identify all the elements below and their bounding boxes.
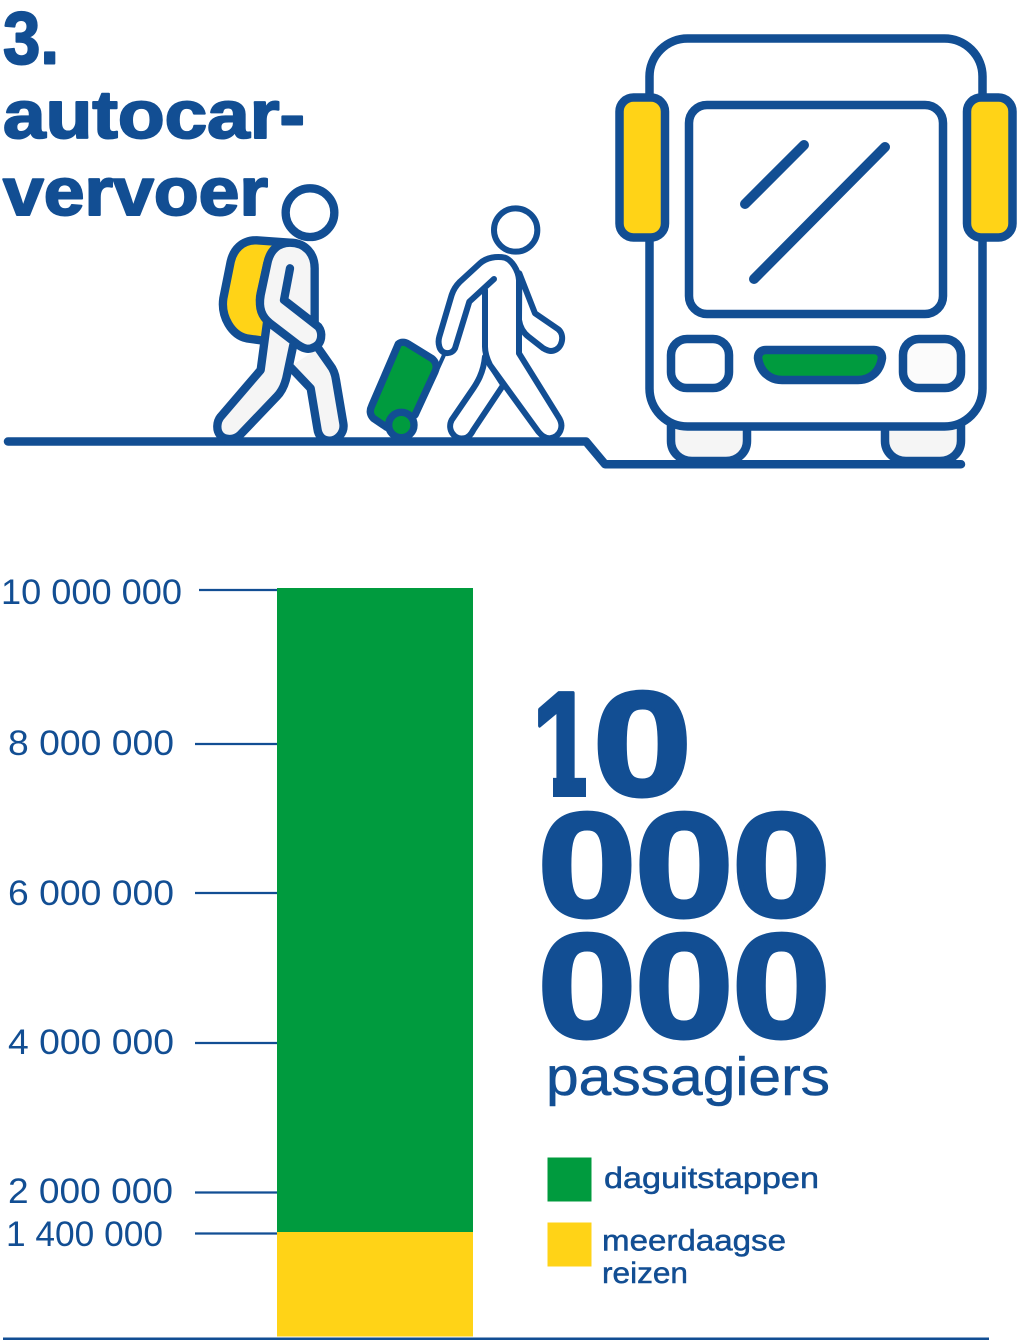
- bus body: [650, 38, 982, 426]
- grille: [758, 350, 882, 380]
- title: vervoer: [3, 154, 268, 230]
- bar chart: [1, 573, 989, 1340]
- big number: 10 000 000 passagiers: 000: [538, 903, 831, 1069]
- legend: [548, 1158, 819, 1290]
- bar: meerdaagse reizen: [277, 1232, 473, 1336]
- right mirror: [967, 98, 1012, 238]
- big number: 10 000 000 passagiers: 0: [593, 661, 692, 827]
- big number: 10 000 000 passagiers: 1: [532, 661, 594, 827]
- windshield reflections: [745, 145, 885, 279]
- icon: suitcase: [370, 342, 444, 438]
- legend label: meerdaagse reizen: [602, 1224, 786, 1290]
- legend swatch: daguitstappen: [548, 1158, 592, 1202]
- axis labels: 2 000 000: [8, 1172, 173, 1211]
- legend label: meerdaagse reizen: reizen: [602, 1257, 688, 1290]
- icon: bus front: [620, 38, 1012, 461]
- bar: daguitstappen: [277, 588, 473, 1232]
- axis labels: 10 000 000: [1, 573, 182, 612]
- left mirror: [620, 98, 665, 238]
- ground line: [8, 442, 961, 464]
- legend label: daguitstappen: daguitstappen: [604, 1162, 819, 1195]
- axis labels: 1 400 000: [6, 1215, 163, 1254]
- icon: traveller pulling suitcase: [439, 208, 562, 439]
- windshield: [689, 105, 943, 314]
- big number: 10 000 000 passagiers: passagiers: [546, 1047, 830, 1107]
- bus wheels: [671, 424, 961, 461]
- axis labels: 6 000 000: [8, 874, 174, 913]
- right headlight: [903, 339, 961, 388]
- title: autocar-: [3, 77, 305, 153]
- left headlight: [671, 339, 729, 388]
- big number: 10 000 000 passagiers: 000: [538, 782, 831, 948]
- icon: hiker with backpack: [217, 188, 344, 441]
- axis labels: 8 000 000: [8, 724, 174, 763]
- axis baseline: [3, 1338, 989, 1340]
- title: [3, 0, 305, 230]
- legend swatch: meerdaagse reizen: [548, 1222, 592, 1266]
- big number: 10 000 000 passagiers: [520, 661, 831, 1107]
- legend label: meerdaagse reizen: meerdaagse: [602, 1224, 786, 1258]
- axis labels: [1, 573, 182, 1254]
- axis labels: 4 000 000: [8, 1023, 174, 1062]
- axis ticks: [195, 590, 277, 1234]
